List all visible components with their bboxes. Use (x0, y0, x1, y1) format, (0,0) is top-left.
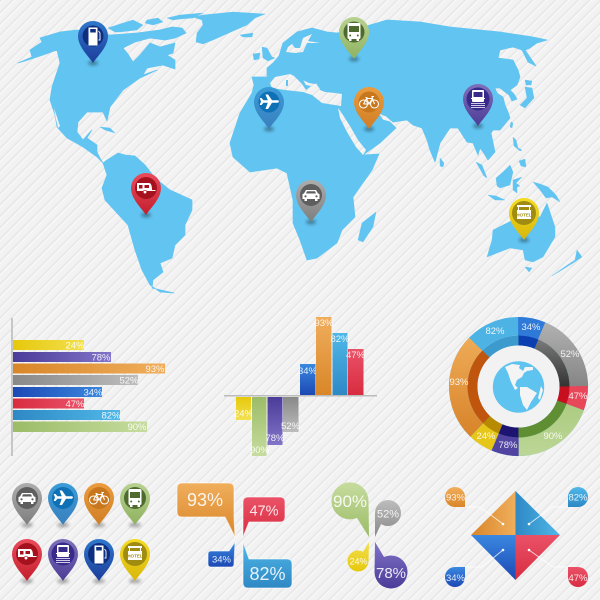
vertical bar chart: 52% (281, 421, 301, 432)
horizontal bar chart: 78% (91, 352, 111, 364)
legend pin: fuel (84, 539, 114, 584)
map pin: trailer (131, 173, 161, 218)
diamond diagram: 82% (568, 492, 588, 504)
donut chart: 34% (521, 322, 541, 333)
donut chart: 52% (560, 349, 580, 360)
donut chart: 82% (485, 326, 505, 337)
donut chart: 93% (449, 377, 469, 388)
icon: globe (493, 361, 544, 413)
callout: round speech bubbles: 52% (377, 508, 399, 520)
horizontal bar chart: 93% (145, 364, 165, 375)
callout: round speech bubbles (332, 482, 407, 588)
callout: round speech bubbles: 78% (376, 565, 406, 582)
map pin: hotel (509, 198, 539, 242)
map pin: car (296, 180, 326, 224)
horizontal bar chart: 90% (127, 422, 147, 433)
donut chart (449, 322, 588, 451)
legend pin: hotel (120, 539, 150, 584)
callout: round speech bubbles: 90% (333, 492, 367, 511)
vertical bar chart: 24% (234, 408, 254, 420)
legend pin: hotel: HOTEL (127, 554, 143, 558)
map pin: bicycle (354, 87, 384, 132)
legend pin: car (12, 483, 42, 528)
horizontal bar chart: 24% (65, 340, 85, 352)
callout: round speech bubbles: 24% (349, 556, 368, 566)
horizontal bar chart: 82% (101, 410, 121, 422)
donut chart: 90% (543, 431, 563, 442)
callout: rectangular speech boxes: 93% (187, 490, 223, 510)
world map (18, 12, 582, 293)
callout: rectangular speech boxes: 47% (249, 504, 279, 520)
donut chart: 24% (476, 431, 496, 442)
map pin: plane (254, 87, 284, 132)
horizontal bar chart: 52% (119, 376, 139, 386)
map pin: train (463, 84, 493, 128)
callout: rectangular speech boxes: 34% (212, 554, 232, 566)
diamond diagram (445, 487, 588, 587)
diamond diagram: 47% (568, 573, 588, 584)
map pin: fuel (78, 21, 108, 66)
vertical bar chart: 90% (250, 445, 270, 456)
vertical bar chart (224, 317, 377, 456)
map pin: hotel: HOTEL (516, 212, 532, 218)
diamond diagram: 34% (446, 573, 466, 584)
map pin: bus (339, 17, 369, 62)
donut chart: 47% (568, 391, 588, 402)
vertical bar chart: 82% (330, 334, 350, 345)
diamond diagram: 93% (446, 492, 466, 504)
vertical bar chart: 47% (346, 350, 366, 361)
horizontal bar chart: 34% (83, 388, 103, 398)
donut chart: 78% (498, 440, 518, 451)
vertical bar chart: 34% (298, 366, 318, 377)
horizontal bar chart: 47% (65, 399, 85, 410)
callout: rectangular speech boxes (177, 483, 292, 588)
callout: rectangular speech boxes: 82% (249, 564, 286, 584)
vertical bar chart: 78% (265, 433, 285, 444)
legend pin: plane (48, 483, 78, 528)
legend pin: bus (120, 483, 150, 528)
legend pin: trailer (12, 539, 42, 584)
legend pin: train (48, 539, 78, 584)
horizontal bar chart (11, 318, 165, 456)
legend pin: bicycle (84, 483, 114, 528)
vertical bar chart: 93% (314, 318, 334, 329)
